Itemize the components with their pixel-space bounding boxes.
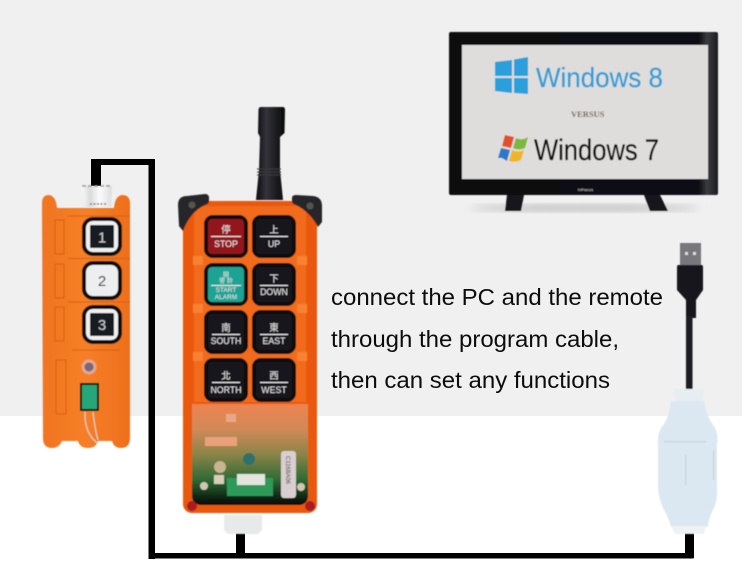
bottom connector — [224, 515, 262, 534]
windows 7 logo — [498, 135, 528, 162]
monitor brand: InFocus — [578, 187, 594, 192]
button START ALARM — [204, 263, 248, 306]
button UP — [252, 215, 296, 258]
windows 8 title: Windows 8 — [536, 62, 663, 93]
program cable line — [91, 159, 694, 559]
antenna — [256, 107, 285, 200]
button START ALARM: START — [216, 287, 236, 294]
rubber corner right — [292, 195, 322, 227]
USB programming cable — [658, 243, 718, 534]
button 2 — [82, 261, 122, 300]
button STOP: 停 — [221, 224, 231, 236]
caption line 1: connect the PC and the remote — [331, 284, 663, 310]
button SOUTH — [204, 310, 248, 354]
caption line 2: through the program cable, — [331, 326, 619, 352]
monitor — [449, 32, 718, 212]
button DOWN — [252, 263, 296, 306]
monitor stand — [505, 195, 668, 211]
windows 8 logo — [495, 57, 528, 94]
button 1 — [82, 217, 122, 256]
monitor bezel — [449, 32, 718, 195]
button START ALARM: ALARM — [215, 294, 237, 301]
button DOWN: DOWN — [260, 287, 288, 297]
indicator light — [82, 360, 96, 374]
background: grey upper wall — [0, 0, 742, 416]
left remote: receiver unit — [42, 186, 130, 448]
screw holes — [187, 501, 315, 511]
USB cord — [686, 316, 692, 390]
button EAST: 東 — [269, 322, 279, 334]
green tag and wire — [80, 383, 99, 443]
dongle marks — [664, 441, 714, 485]
remote body — [183, 201, 317, 513]
left remote body — [42, 195, 130, 448]
USB plug body — [677, 265, 703, 318]
left remote connector — [81, 186, 112, 207]
left remote grooves — [55, 216, 130, 414]
dongle top collar — [673, 389, 704, 402]
monitor shadow — [470, 204, 700, 212]
button 1: 1 — [98, 230, 106, 246]
inner recess — [194, 206, 306, 402]
button WEST — [252, 358, 296, 402]
versus label: VERSUS — [571, 109, 605, 119]
caption text — [331, 284, 663, 393]
USB metal plug — [680, 243, 701, 265]
button UP: 上 — [269, 225, 279, 236]
button DOWN: 下 — [269, 274, 279, 285]
side notches — [193, 256, 307, 361]
dongle bottom collar — [671, 526, 706, 534]
button WEST: WEST — [261, 385, 287, 395]
button UP: UP — [268, 239, 280, 249]
button EAST: EAST — [263, 336, 286, 346]
button START ALARM: 警 鈴 — [219, 277, 233, 285]
button STOP: STOP — [214, 239, 238, 249]
circuit board parts: C1168A06 — [284, 456, 290, 485]
button NORTH: NORTH — [210, 385, 242, 395]
center remote: transmitter — [178, 107, 322, 534]
button 3 — [82, 305, 122, 344]
monitor screen — [462, 45, 708, 179]
button 2: 2 — [98, 273, 106, 290]
circuit board window — [192, 404, 308, 505]
rubber corner left — [178, 194, 209, 231]
dongle body — [658, 401, 718, 527]
windows 7 title: Windows 7 — [534, 134, 659, 167]
button 3: 3 — [98, 317, 106, 334]
button EAST — [252, 310, 296, 354]
button SOUTH: SOUTH — [211, 336, 241, 346]
button START ALARM: 開 — [223, 272, 229, 279]
button NORTH: 北 — [221, 371, 231, 382]
button NORTH — [204, 358, 248, 402]
button SOUTH: 南 — [221, 322, 231, 334]
circuit board parts — [200, 414, 305, 498]
button STOP — [204, 215, 248, 258]
caption line 3: then can set any functions — [331, 367, 610, 393]
button WEST: 西 — [269, 371, 279, 382]
